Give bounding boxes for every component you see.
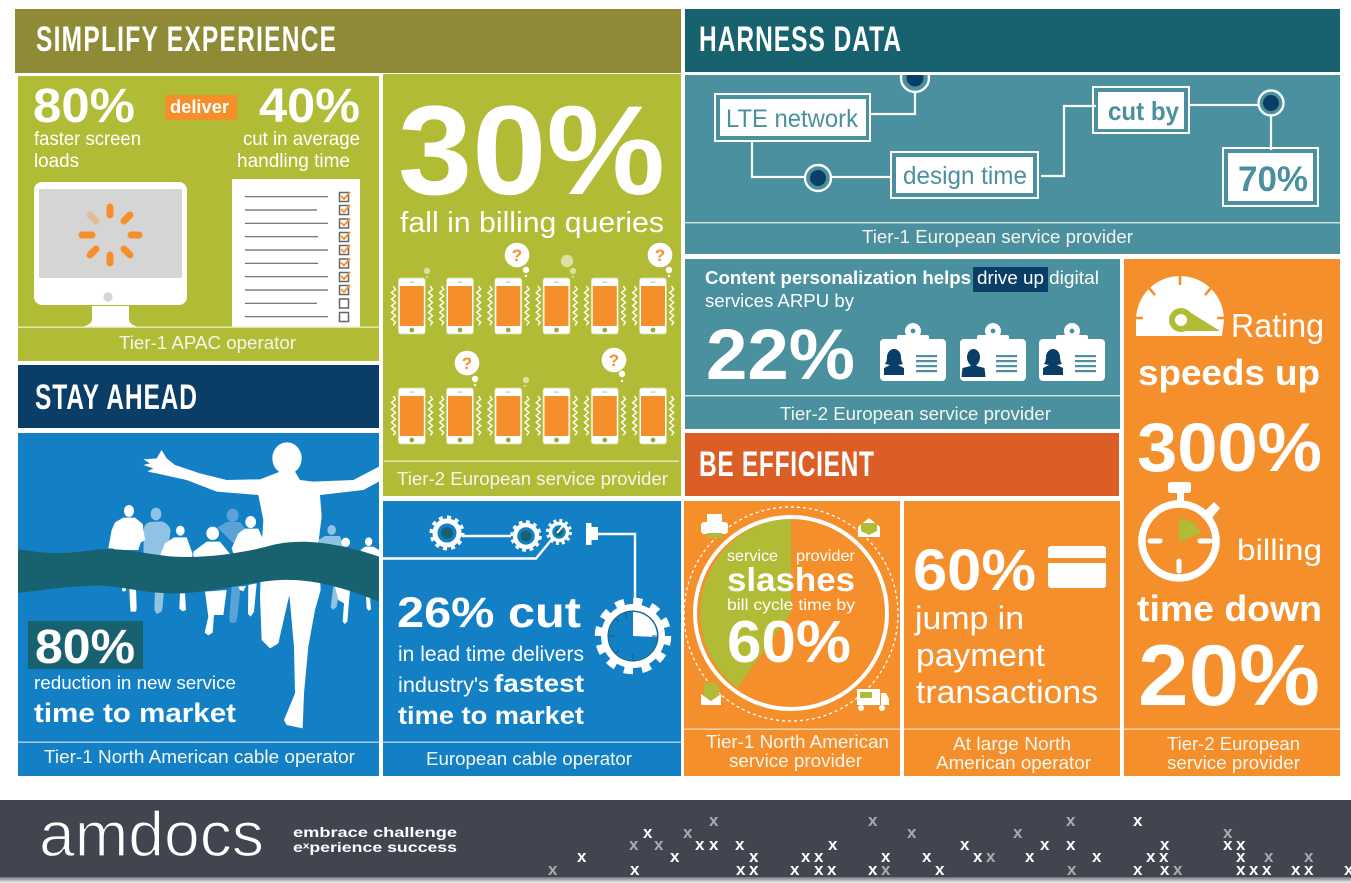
panel: bill cycle time <box>684 501 900 776</box>
text: content personalization helps drive up digital services ARPU by: Content personalization helps <box>705 268 971 288</box>
icon: envelope with letter <box>858 518 880 537</box>
text: content personalization helps drive up digital services ARPU by: services ARPU by <box>705 291 854 311</box>
box: 70%: 70% <box>1238 160 1308 199</box>
pattern of x marks: xxxxxxxxxxxxx <box>577 847 1246 866</box>
header: Stay Ahead <box>18 365 379 428</box>
panel: screen loads and handling time <box>18 76 379 361</box>
text: content personalization helps drive up digital services ARPU by: digital <box>1049 268 1099 288</box>
icon: delivery truck <box>857 689 889 711</box>
text: jump in payment transactions: payment <box>916 637 1045 673</box>
icon group: thought bubbles with question marks: ? <box>655 246 665 265</box>
box: design time: design time <box>903 162 1027 190</box>
icon group: vibrating phones bottom row <box>392 388 674 444</box>
illustration: runners crossing finishing tape <box>13 442 379 728</box>
icon group: thought bubbles with question marks: ? <box>512 246 522 265</box>
text: Rating: Rating <box>1231 307 1324 344</box>
stat: 40% cut in average handling time: 40% <box>259 80 360 133</box>
header: Be Efficient: BE EFFICIENT <box>699 446 874 484</box>
box: 70% <box>1223 148 1318 206</box>
badge: deliver <box>165 95 237 120</box>
pattern of x marks: xxxxxxxxxx <box>695 835 1246 854</box>
text: jump in payment transactions: transactions <box>916 674 1098 710</box>
text: service provider slashes bill cycle time by 60%: bill cycle time by <box>727 597 855 614</box>
icon: gear clock <box>598 602 668 670</box>
box: LTE network <box>715 94 870 141</box>
icon: printer <box>701 514 728 538</box>
box: LTE network: LTE network <box>726 105 858 133</box>
text: in lead time delivers industry's fastest time to market <box>398 643 585 730</box>
text: in lead time delivers industry's fastest time to market: in lead time delivers <box>398 643 584 666</box>
stat: 60%: 60% <box>913 538 1036 603</box>
box: cut by <box>1093 87 1189 133</box>
source: Tier-2 European service provider <box>1167 734 1300 773</box>
source: Tier-2 European service provider: Tier-2 European service provider <box>397 469 668 489</box>
stat: 300%: 300% <box>1137 409 1322 486</box>
header: Harness Data: HARNESS DATA <box>699 21 901 59</box>
icon group: vibrating phones top row <box>392 278 674 334</box>
text: speeds up: speeds up <box>1138 352 1320 393</box>
stat: 40% cut in average handling time: handling time <box>237 151 350 172</box>
text: service provider slashes bill cycle time by 60%: service <box>727 548 778 565</box>
text: service provider slashes bill cycle time by 60%: 60% <box>727 609 851 675</box>
tagline: embrace challenge <box>293 824 457 840</box>
source: Tier-2 European service provider: Tier-2 European <box>1167 734 1300 754</box>
source: Tier-1 North American service provider: Tier-1 North American <box>706 732 889 752</box>
source: At large North American operator: At large North <box>953 734 1071 754</box>
icon: stopwatch <box>1142 482 1219 578</box>
header: Simplify Experience <box>15 9 681 73</box>
stat: 80% reduction in time to market: time to market <box>34 698 236 728</box>
stat: 22%: 22% <box>706 316 855 395</box>
text: content personalization helps drive up digital services ARPU by <box>705 267 1099 311</box>
panel: time to market runner <box>13 433 379 776</box>
footer band <box>0 800 1351 883</box>
icon: envelope with document <box>701 683 721 705</box>
text: service provider slashes bill cycle time by 60% <box>727 548 856 675</box>
pattern of x marks: x <box>643 823 653 842</box>
box: cut by: cut by <box>1108 96 1179 126</box>
tagline <box>293 824 457 855</box>
pattern of x marks: xxx <box>986 847 1314 866</box>
panel: content personalization <box>685 259 1120 429</box>
icon group: thought bubbles with question marks <box>424 243 672 387</box>
panel: 26% cut in lead time <box>383 501 681 776</box>
text: in lead time delivers industry's fastest time to market: fastest <box>494 670 585 698</box>
text: in lead time delivers industry's fastest time to market: time to market <box>398 702 585 730</box>
source: Tier-1 European service provider: Tier-1 European service provider <box>862 227 1133 247</box>
text: time down: time down <box>1137 588 1322 629</box>
header: Harness Data <box>685 9 1340 72</box>
diagram: circuit flow <box>752 64 1284 191</box>
text: in lead time delivers industry's fastest time to market: industry's <box>398 674 489 697</box>
source: European cable operator: European cable operator <box>426 749 632 769</box>
pattern of x marks: x <box>1133 811 1143 830</box>
stat: 26% cut: 26% cut <box>397 589 581 637</box>
icon: ID card woman <box>880 323 946 381</box>
source: Tier-1 North American service provider <box>706 732 889 771</box>
source: Tier-1 APAC operator: Tier-1 APAC operator <box>119 333 296 353</box>
stat: 80% faster screen loads: loads <box>34 151 79 172</box>
source: Tier-2 European service provider: Tier-2 European service provider <box>780 404 1051 424</box>
text: service provider slashes bill cycle time by 60%: slashes <box>727 561 855 598</box>
panel: rating and billing <box>1124 259 1340 776</box>
panel: payment transactions <box>904 501 1120 776</box>
icon group: thought bubbles with question marks: ? <box>609 351 619 370</box>
chart: circular pie with dashed orbit <box>684 507 898 721</box>
stat: 80% faster screen loads: 80% <box>33 80 135 133</box>
icon: ID card man <box>960 323 1026 381</box>
icon: monitor with loading spinner <box>34 182 187 327</box>
stat: 80% reduction in time to market <box>28 621 236 728</box>
stat: 30%: 30% <box>398 79 665 221</box>
panel: LTE network design time <box>685 64 1340 254</box>
text: content personalization helps drive up digital services ARPU by: drive up <box>977 268 1044 288</box>
stat: 80% faster screen loads: faster screen <box>34 129 141 150</box>
pattern of x marks: xxx <box>709 811 1076 830</box>
stat: 80% reduction in time to market: reduction in new service <box>34 673 236 693</box>
pattern of x marks <box>548 811 1351 879</box>
tagline: eˣperience success <box>293 839 457 855</box>
text: jump in payment transactions: jump in <box>914 600 1024 636</box>
header: Be Efficient <box>685 433 1119 496</box>
icon: ID card woman <box>1039 323 1105 381</box>
header: Stay Ahead: STAY AHEAD <box>35 379 197 417</box>
pattern of x marks: xxxx <box>548 860 1183 879</box>
stat: 40% cut in average handling time <box>237 80 360 172</box>
source: At large North American operator: American operator <box>936 753 1091 773</box>
box: design time <box>891 152 1038 198</box>
panel: 30% fall in billing queries <box>383 74 681 496</box>
illustration: gears and circuit line <box>383 518 635 600</box>
icon: speedometer <box>1134 274 1226 336</box>
header: Simplify Experience: SIMPLIFY EXPERIENCE <box>36 21 336 59</box>
icon group: thought bubbles with question marks: ? <box>462 354 472 373</box>
icon: payment card <box>1048 546 1106 588</box>
stat: 80% reduction in time to market: 80% <box>35 621 135 674</box>
stat: 40% cut in average handling time: cut in average <box>243 129 360 150</box>
stat: 80% faster screen loads <box>33 80 141 172</box>
pattern of x marks: xx <box>629 835 664 854</box>
pattern of x marks: xxxxxxxxxxxxxxxx <box>630 860 1351 879</box>
badge: deliver: deliver <box>170 97 229 117</box>
text: billing: billing <box>1237 534 1322 567</box>
source: Tier-1 North American service provider: service provider <box>729 751 862 771</box>
pattern of x marks: xxxx <box>683 823 1233 842</box>
caption: fall in billing queries: fall in billing queries <box>400 207 664 239</box>
icon: checklist <box>232 179 360 327</box>
source: Tier-1 North American cable operator: Tier-1 North American cable operator <box>44 747 355 767</box>
text: jump in payment transactions <box>914 600 1098 710</box>
stat: 20%: 20% <box>1138 628 1320 724</box>
logo: amdocs: amdocs <box>39 800 264 870</box>
source: Tier-2 European service provider: service provider <box>1167 753 1300 773</box>
text: service provider slashes bill cycle time by 60%: provider <box>796 548 856 565</box>
source: At large North American operator <box>936 734 1091 773</box>
